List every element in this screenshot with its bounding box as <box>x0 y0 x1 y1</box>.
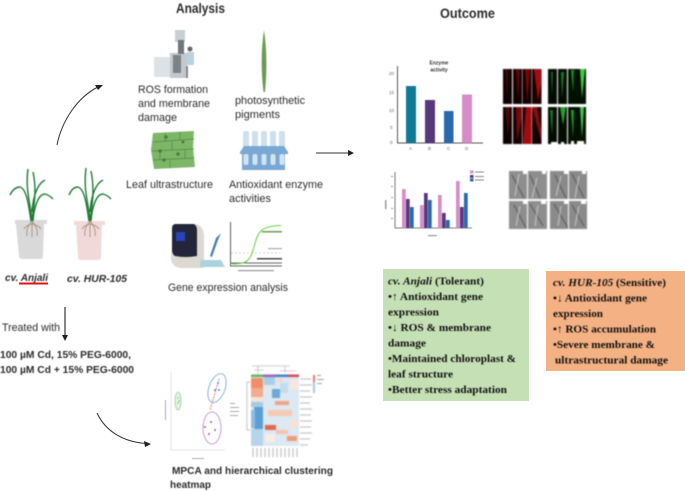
icon: leaf cells <box>151 131 195 169</box>
label: photosynthetic pigments <box>235 95 305 121</box>
icon: leaf <box>262 30 266 92</box>
icon: test tube rack <box>240 131 288 170</box>
label: Antioxidant enzyme activities: activities <box>229 193 271 205</box>
label: ROS formation <box>138 84 210 124</box>
bar chart: enzyme activity: 0 <box>390 140 393 145</box>
panel: HUR-105 sensitive box: expression <box>553 308 603 320</box>
arrow: treatment to clustering <box>97 413 151 447</box>
treatment list: 100 µM Cd, 15% PEG-6000, <box>0 349 131 361</box>
panel heading: cv. HUR-105 (Sensitive) <box>553 277 666 289</box>
icon: microscope <box>154 30 194 78</box>
bar chart: enzyme activity: C <box>447 146 451 151</box>
label: Antioxidant enzyme activities <box>229 179 323 205</box>
arrow: analysis to outcome <box>316 150 354 156</box>
panel: Anjali tolerant box: •Better stress adaptation <box>388 384 507 396</box>
label: cv. HUR-105: cv. HUR-105 <box>67 273 127 285</box>
panel: HUR-105 sensitive box: ultrastructural damage <box>555 354 668 366</box>
panel: HUR-105 sensitive box: •Severe membrane & <box>553 339 655 351</box>
panel: HUR-105 sensitive box: •↑ ROS accumulation <box>553 324 656 336</box>
panel: Anjali tolerant box: •↑ Antioxidant gene <box>388 291 483 303</box>
panel heading: cv. Anjali (Tolerant) <box>388 276 484 288</box>
bar chart: enzyme activity: 15 <box>389 90 395 95</box>
label: Antioxidant enzyme activities: Antioxidant enzyme <box>229 179 323 191</box>
bar chart: enzyme activity: 10 <box>389 108 395 113</box>
bar chart: enzyme activity <box>389 60 483 151</box>
legend <box>470 170 484 182</box>
treatment list: 100 µM Cd + 15% PEG-6000 <box>0 364 134 376</box>
bar chart: enzyme activity: 5 <box>390 125 393 130</box>
bar chart: enzyme activity: A <box>409 146 412 151</box>
plant: cv. Anjali <box>10 169 53 259</box>
arrow: treated with <box>62 307 68 341</box>
label: MPCA and hierarchical clustering heatmap <box>170 465 333 491</box>
label: photosynthetic pigments: pigments <box>235 109 280 121</box>
bar chart: enzyme activity: 20 <box>389 71 395 76</box>
panel: Anjali tolerant box <box>383 269 529 401</box>
label: MPCA and hierarchical clustering heatmap: MPCA and hierarchical clustering <box>172 465 333 477</box>
treatment list <box>0 349 134 376</box>
label: Treated with: Treated with <box>2 322 60 334</box>
panel: Anjali tolerant box: •↓ ROS & membrane <box>388 322 491 334</box>
icon: qPCR machine <box>171 224 225 268</box>
label: Gene expression analysis: Gene expression analysis <box>168 282 288 294</box>
label: ROS formation: and membrane <box>138 98 210 110</box>
micrographs: green fluorescence <box>548 69 586 145</box>
panel: HUR-105 sensitive box <box>546 271 685 371</box>
label: cv. Anjali: cv. Anjali <box>5 272 49 284</box>
chart title: Enzyme <box>430 60 449 66</box>
panel: Anjali tolerant box: damage <box>388 338 426 350</box>
panel: Anjali tolerant box: •Maintained chloroplast & <box>388 353 516 365</box>
arrow: plants to analysis <box>57 85 103 145</box>
heading: Analysis: Analysis <box>176 0 225 16</box>
chart title <box>430 60 449 74</box>
panel: Anjali tolerant box: expression <box>388 306 439 318</box>
label: photosynthetic pigments: photosynthetic <box>235 95 305 107</box>
micrographs: red fluorescence <box>503 69 542 144</box>
grouped bar chart <box>385 170 484 236</box>
plant: cv. HUR-105 <box>69 168 111 260</box>
panel: Anjali tolerant box: leaf structure <box>388 368 453 380</box>
micrographs: electron microscopy <box>509 171 587 229</box>
chart: amplification curve <box>230 222 282 271</box>
label: Leaf ultrastructure: Leaf ultrastructure <box>126 179 213 191</box>
bar chart: enzyme activity: D <box>465 146 469 151</box>
chart: hierarchical clustering heatmap <box>247 366 324 457</box>
label: ROS formation: damage <box>138 112 177 124</box>
label: MPCA and hierarchical clustering heatmap: heatmap <box>170 479 211 491</box>
bar chart: enzyme activity: B <box>428 146 431 151</box>
chart title: activity <box>430 68 448 74</box>
heading: Outcome: Outcome <box>440 5 495 21</box>
chart: PCA plot <box>165 371 239 459</box>
label: ROS formation: ROS formation <box>138 84 208 96</box>
panel: HUR-105 sensitive box: •↓ Antioxidant gene <box>553 292 647 304</box>
